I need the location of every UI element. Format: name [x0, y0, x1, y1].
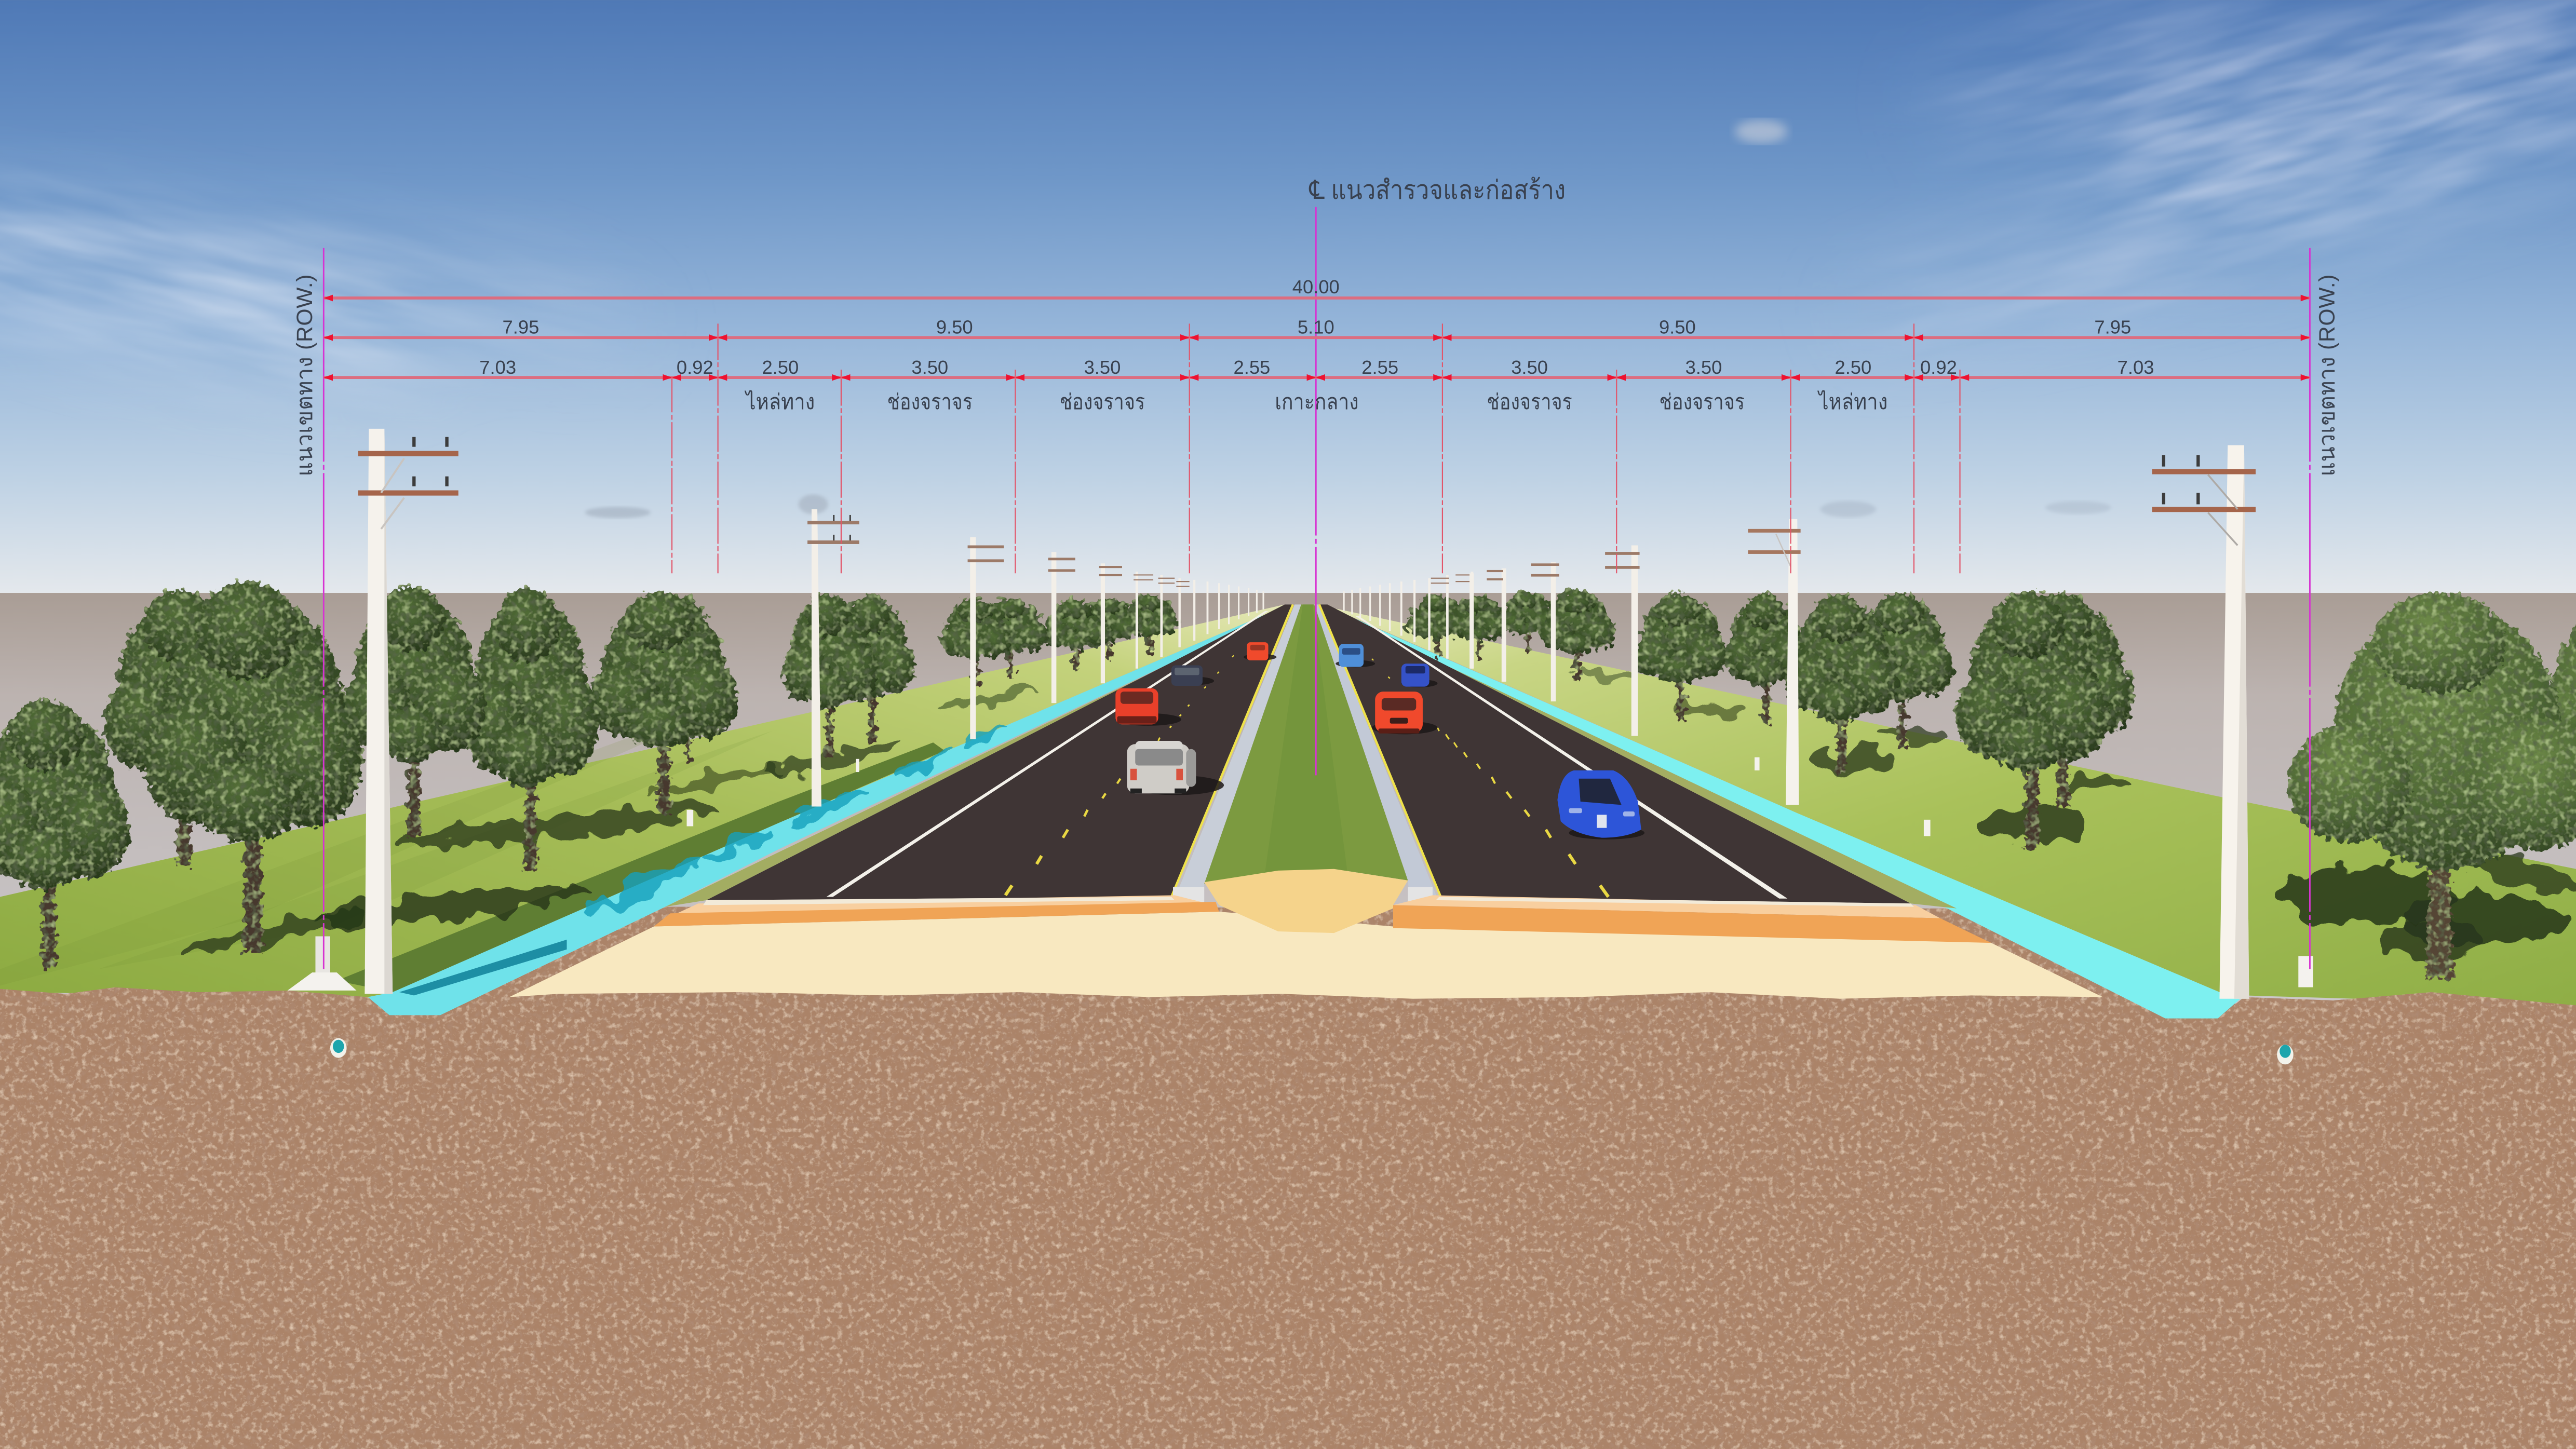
dimension values row two: 9.50 — [1659, 316, 1696, 337]
sand embankment — [509, 895, 2103, 999]
tree right 4 — [1852, 593, 1953, 748]
right-of-way label left: แนวเขตทาง (ROW.) — [292, 274, 317, 477]
right-of-way boundary line right — [2309, 248, 2310, 969]
utility pole right big — [2152, 445, 2256, 999]
dimension values row three: 2.50 — [762, 357, 799, 378]
utility pole right 2 — [1605, 545, 1640, 736]
grass embankment left — [0, 604, 1285, 997]
tree right 5 — [1724, 593, 1808, 724]
dimension values row three: 2.55 — [1233, 357, 1270, 378]
dimension values row three: 0.92 — [677, 357, 713, 378]
car: blue hatchback right — [1557, 770, 1644, 839]
tree right 9 — [1449, 594, 1508, 660]
title: survey and construction line: ℄ แนวสำรวจและก่อสร้าง — [1309, 175, 1566, 205]
soil underground — [0, 907, 2576, 1449]
road pavement left carriageway — [706, 604, 1293, 900]
tree right 7 — [1539, 590, 1615, 680]
tree left 8 — [940, 598, 1011, 687]
drain pipes — [330, 1038, 2294, 1064]
far lamp poles converging left — [1134, 572, 1263, 669]
element labels: ไหล่ทาง — [745, 390, 815, 414]
tree left 9 — [972, 598, 1049, 677]
grass shadows right — [1569, 669, 2576, 963]
car: dark rear left — [1171, 665, 1214, 686]
sky background — [0, 0, 2576, 593]
dimension value total: 40.00 — [1292, 276, 1340, 297]
dimension values row two: 7.95 — [503, 316, 539, 337]
dimension line 40.00 total — [323, 297, 2310, 299]
tree left 5 — [590, 591, 738, 815]
dimension values row three: 3.50 — [911, 357, 948, 378]
utility pole left 5 — [1099, 563, 1122, 683]
trees back row — [0, 581, 2576, 979]
dimension values row three: 3.50 — [1084, 357, 1121, 378]
element labels: ไหล่ทาง — [1817, 390, 1887, 414]
roadside drain left — [368, 611, 1280, 1015]
dimension values row two: 5.10 — [1298, 316, 1334, 337]
distant haze band — [0, 593, 2576, 1004]
median green — [1204, 604, 1408, 884]
element labels — [745, 390, 1887, 414]
car: dark blue right far — [1401, 663, 1437, 687]
car: red rear left — [1115, 688, 1181, 726]
tree left 2 back — [104, 590, 264, 865]
extension ticks — [672, 323, 1960, 573]
utility pole right 4 — [1487, 568, 1506, 682]
grass shadows left — [181, 684, 1039, 960]
right-of-way boundary line left — [323, 248, 324, 969]
pavement layer orange left — [654, 902, 1219, 927]
utility pole right 3 — [1531, 562, 1559, 701]
dimension values row three: 7.03 — [2118, 357, 2154, 378]
utility pole left 2 — [807, 509, 859, 807]
dimension row two — [323, 337, 2310, 338]
dimension row three — [323, 377, 2310, 378]
roadside drain right — [1334, 610, 2244, 1019]
car: white sedan — [1127, 741, 1224, 795]
tree right 6 — [1634, 593, 1728, 721]
median sand core — [1204, 869, 1408, 933]
tree left 3 — [343, 587, 485, 836]
yellow lane dashes right — [1372, 659, 1608, 897]
tree far right edge — [2531, 610, 2576, 821]
dimension values row three — [479, 357, 2154, 378]
far lamp poles converging right — [1344, 572, 1474, 669]
dimension values row three: 3.50 — [1511, 357, 1548, 378]
dimension values row two: 9.50 — [936, 316, 973, 337]
markers posts — [288, 757, 2313, 991]
right-of-way label right: แนวเขตทาง (ROW.) — [2315, 274, 2340, 477]
car: red small left — [1244, 642, 1276, 660]
tree left 2 front — [144, 581, 362, 953]
dimension values row three: 2.50 — [1835, 357, 1871, 378]
tree right 3 — [1786, 594, 1898, 775]
road shoulders slope — [665, 604, 1957, 909]
survey centre line — [1315, 207, 1316, 775]
tree right big — [2288, 592, 2576, 979]
car: red suv right — [1372, 692, 1437, 734]
element labels: ช่องจราจร — [1487, 390, 1572, 414]
dimension values row three: 7.03 — [479, 357, 516, 378]
dimension values row three: 2.55 — [1361, 357, 1398, 378]
yellow lane dashes left — [1005, 655, 1234, 895]
tree left 1 front — [0, 700, 129, 969]
element labels: เกาะกลาง — [1275, 390, 1359, 414]
tree left 12 — [1121, 594, 1180, 654]
tree right 2 back — [1992, 593, 2135, 807]
grass embankment right — [1324, 606, 2576, 1005]
utility pole right 1 — [1748, 519, 1801, 805]
tree right 8 — [1498, 591, 1557, 654]
tree left 10 — [1040, 600, 1113, 670]
tree left 5 back — [659, 597, 718, 764]
element labels: ช่องจราจร — [887, 390, 973, 414]
dimension values row two: 7.95 — [2094, 316, 2131, 337]
road pavement right carriageway — [1319, 604, 1911, 903]
median curb right — [1314, 604, 1441, 903]
median curb left — [1171, 604, 1301, 903]
tree left 11 — [1076, 598, 1141, 660]
pavement layer orange right — [1393, 905, 1991, 943]
tree right 10 — [1405, 594, 1470, 657]
clouds — [0, 0, 2576, 518]
utility pole left 3 — [968, 537, 1004, 739]
dimension values row three: 3.50 — [1685, 357, 1722, 378]
utility pole left 4 — [1048, 552, 1075, 703]
tree left 4 — [463, 588, 599, 871]
element labels: ช่องจราจร — [1060, 390, 1145, 414]
dimension values row two — [503, 316, 2131, 337]
tree left 6 — [783, 593, 877, 757]
tree right 2 front — [1955, 591, 2109, 848]
road edge lines — [826, 611, 1787, 899]
dimension values row three: 0.92 — [1920, 357, 1957, 378]
element labels: ช่องจราจร — [1660, 390, 1745, 414]
utility pole right 5 — [1469, 573, 1474, 669]
utility pole left 1 — [358, 429, 458, 994]
car: blue right far — [1336, 644, 1375, 667]
tree left 7 — [830, 594, 915, 742]
